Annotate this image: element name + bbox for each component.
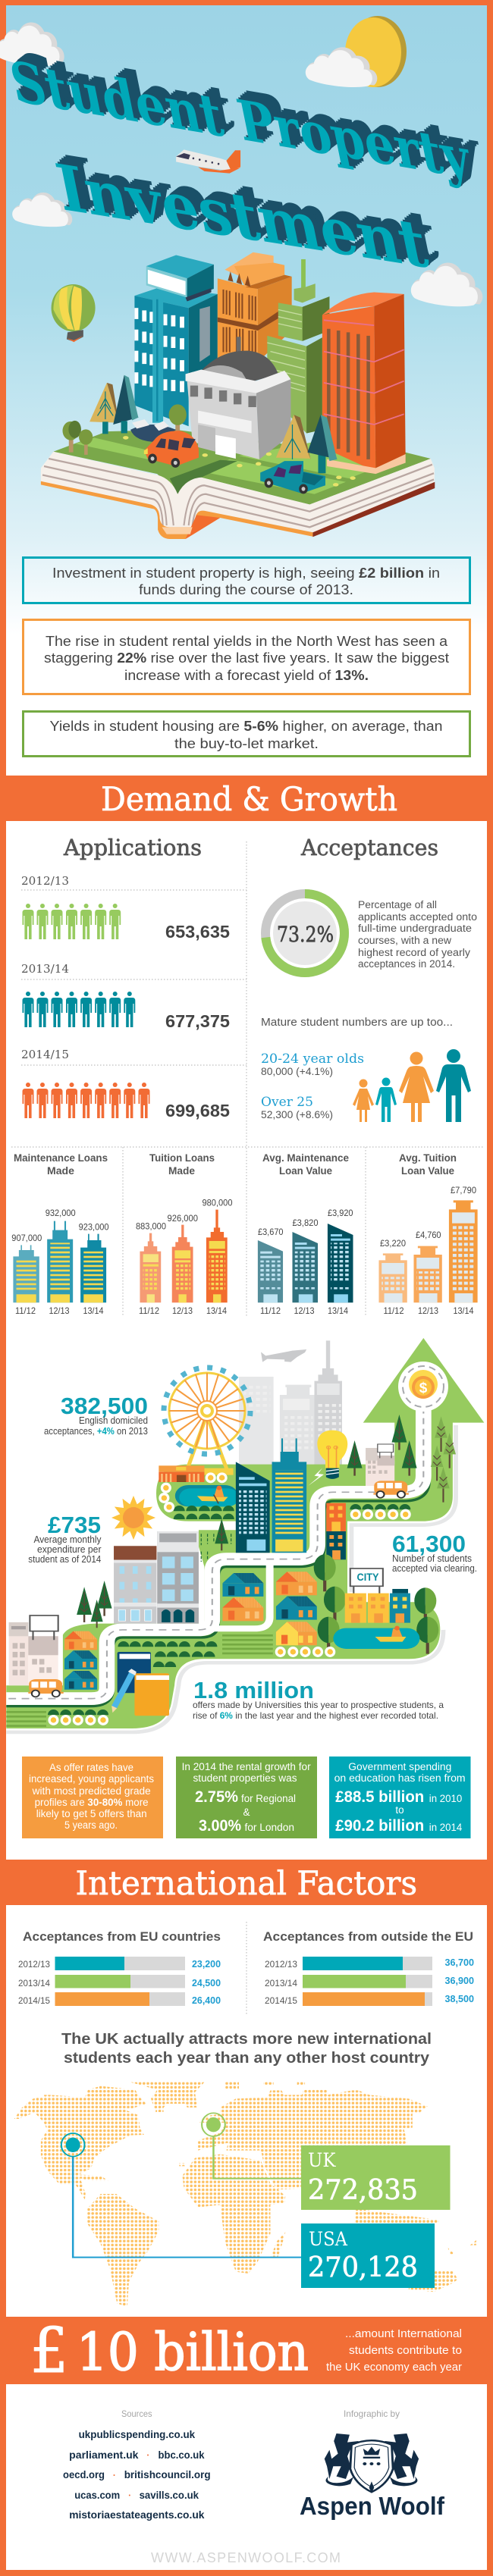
callout: 22% rise: staggering 22% rise over the last five years. It saw the biggest (44, 650, 449, 666)
logo crest (325, 2433, 419, 2493)
chart: acceptances from outside the EU: 36,700 (444, 1957, 474, 1968)
callout: USA 270,128: USA (309, 2228, 348, 2250)
dividers (11, 841, 483, 1316)
info box: government spending: £88.5 billion (335, 1788, 424, 1806)
stat: 1.8 million: 1.8 million (193, 1677, 314, 1703)
chart: tuition loans made: 926,000 (167, 1213, 198, 1224)
pin and line: UK (202, 2113, 301, 2179)
applications 2013/14 (21, 962, 230, 1031)
stat: £735 (28, 1512, 102, 1565)
title line 2 extrusion: Investment (60, 142, 444, 275)
info box: offer rates: likely to get 5 offers than (36, 1808, 147, 1819)
chart: maintenance loans made: 11/12 (15, 1305, 36, 1316)
grass strips and bushes (6, 1634, 273, 1727)
callout: USA 270,128: 270,128 (308, 2252, 418, 2283)
band: £10 billion: £ (30, 2315, 68, 2387)
stat: 382,500: English domiciled (79, 1415, 148, 1426)
donut chart 73.2%: 73.2% (277, 922, 334, 947)
title line 2 extrusion: Investment (58, 143, 441, 277)
heading: UK attracts more students: The UK actually attracts more new international (61, 2031, 432, 2048)
chart: acceptances from EU countries: Acceptances from EU countries (23, 1929, 221, 1944)
applications 2012/13: 653,635 (165, 922, 230, 942)
stat: 61,300: Number of students (392, 1553, 472, 1564)
green land with arrow (6, 1338, 484, 1732)
sources list: ucas.com (74, 2489, 120, 2501)
chart: acceptances from outside the EU: 38,500 (444, 1993, 474, 2004)
section band: Demand & Growth: Demand & Growth (101, 781, 397, 819)
callout: UK 272,835 (301, 2145, 451, 2210)
credit: infographic by Aspen Woolf: Infographic by (344, 2408, 400, 2419)
stat: 382,500 (44, 1393, 148, 1437)
applications 2014/15: 2014/15 (21, 1048, 69, 1061)
applications 2013/14: 677,375 (165, 1011, 230, 1031)
coin roundabout (398, 1362, 448, 1412)
divider (246, 1922, 247, 2015)
info box: offer rates (22, 1757, 163, 1838)
pine in front of left block (215, 1518, 228, 1550)
chart: average tuition loan value: Avg. Tuition (399, 1152, 457, 1164)
chart: average maintenance loan value: Avg. Maintenance (262, 1152, 349, 1164)
trees and left block (9, 1581, 112, 1685)
chart: maintenance loans made: Made (47, 1164, 74, 1177)
panel: acceptances (261, 835, 477, 1122)
chart: average tuition loan value: £4,760 (416, 1230, 441, 1240)
chart: acceptances from outside the EU: 2014/15 (265, 1995, 297, 2006)
road (6, 1408, 429, 1706)
acceptance description: applicants accepted onto (358, 911, 477, 923)
chart: acceptances from outside the EU: 2012/13 (265, 1959, 297, 1970)
illustration: city on open book (41, 252, 435, 539)
stat: 382,500: 382,500 (61, 1393, 148, 1419)
coin roundabout: $ (419, 1380, 428, 1396)
chart: tuition loans made: 11/12 (139, 1305, 159, 1316)
sources list: ukpublicspending.co.uk (79, 2428, 195, 2440)
book cover (41, 481, 435, 539)
chart: average maintenance loan value: Loan Value (279, 1164, 332, 1177)
chart: maintenance loans made: 12/13 (49, 1305, 70, 1316)
applications 2012/13 (21, 874, 230, 942)
small bushes (123, 436, 356, 487)
chart: tuition loans made: 12/13 (172, 1305, 193, 1316)
chart: acceptances from outside the EU: 2013/14 (265, 1978, 297, 1988)
chart: average tuition loan value (378, 1152, 478, 1316)
illustrated road map (6, 1338, 484, 1732)
sources list: mistoriaestateagents.co.uk (69, 2509, 205, 2521)
callout: £2 billion: funds during the course of 2013. (139, 582, 353, 597)
panel: applications (21, 835, 230, 1120)
dotted world map (11, 2081, 485, 2316)
callout: 22% rise: The rise in student rental yields in the North West has seen a (46, 634, 448, 649)
chart: average tuition loan value: 11/12 (384, 1305, 404, 1316)
sources list: britishcouncil.org (124, 2468, 211, 2480)
sources list (63, 2408, 211, 2521)
callout: UK 272,835: 272,835 (308, 2175, 418, 2206)
chart: average maintenance loan value: 13/14 (328, 1305, 348, 1316)
bus on road (373, 1481, 409, 1498)
chart: maintenance loans made: Maintenance Loans (14, 1152, 108, 1164)
sources list: Sources (121, 2408, 152, 2419)
stat: £735: Average monthly (33, 1534, 102, 1545)
chart: average tuition loan value: Loan Value (401, 1164, 454, 1177)
book grass (53, 430, 431, 505)
city billboard (350, 1568, 383, 1596)
chart: average maintenance loan value: £3,670 (258, 1227, 284, 1237)
heading: UK attracts more students: students each year than any other host country (64, 2050, 430, 2067)
stat: over 25: 52,300 (+8.6%) (261, 1108, 333, 1120)
dark teal building (236, 1462, 270, 1553)
city billboard label: CITY (356, 1571, 379, 1583)
grey skyline (239, 1340, 342, 1465)
info box: government spending (329, 1757, 470, 1838)
cloud left (12, 193, 72, 227)
stat: 20-24 year olds: 20-24 year olds (261, 1051, 364, 1067)
chart: tuition loans made: Made (168, 1164, 195, 1177)
chart: average maintenance loan value: 12/13 (294, 1305, 315, 1316)
sun (345, 16, 407, 87)
chart: acceptances from EU countries: 24,500 (192, 1977, 221, 1988)
info box: rental growth: 2.75% (195, 1788, 238, 1806)
lake with rower (175, 1485, 239, 1506)
section band: International Factors (0, 1860, 493, 1905)
website footer: WWW.ASPENWOOLF.COM (151, 2550, 341, 2565)
mature students text: Mature student numbers are up too... (261, 1016, 453, 1029)
info box: rental growth: for Regional (241, 1793, 296, 1804)
band: £10 billion: 10 billion (77, 2323, 309, 2383)
bushes and flowers (159, 1472, 411, 1520)
chart: acceptances from outside the EU: Acceptances from outside the EU (263, 1929, 473, 1944)
yellow blocks (345, 1589, 410, 1623)
park pavilion (159, 1465, 234, 1482)
icon: sun (111, 1496, 155, 1540)
callout: 5-6% higher: the buy-to-let market. (174, 736, 319, 751)
cloud top right (306, 47, 377, 87)
right trees (276, 415, 337, 473)
callout: 5-6% higher (23, 711, 470, 757)
ferris wheel (164, 1368, 250, 1469)
houses (64, 1572, 317, 1690)
donut chart 73.2% (265, 894, 344, 973)
stat: £735: £735 (48, 1512, 101, 1538)
info box: rental growth: & (243, 1807, 250, 1818)
info box: government spending: £90.2 billion (335, 1817, 424, 1835)
callout: UK 272,835: UK (308, 2149, 337, 2171)
pine trees by arrow (347, 1415, 456, 1503)
left trees (62, 375, 187, 455)
grey apartment blocks (114, 1531, 199, 1624)
stat: 61,300 (392, 1531, 477, 1574)
stat: 61,300: accepted via clearing. (392, 1563, 477, 1574)
sources list: parliament.uk (69, 2449, 139, 2461)
info box: offer rates: increased, young applicants (29, 1773, 154, 1785)
sources list: bbc.co.uk (158, 2449, 205, 2461)
chart: average tuition loan value: 12/13 (418, 1305, 438, 1316)
callout: 22% rise (23, 620, 470, 694)
chart: tuition loans made: Tuition Loans (149, 1152, 215, 1164)
chart: average maintenance loan value: £3,920 (328, 1208, 353, 1218)
chart: average maintenance loan value: £3,820 (293, 1217, 319, 1228)
teal pickup truck (260, 461, 325, 494)
section band: Demand & Growth (0, 776, 493, 821)
chart: average maintenance loan value: 11/12 (260, 1305, 281, 1316)
applications 2014/15: 699,685 (165, 1101, 230, 1120)
applications 2014/15 (21, 1048, 230, 1120)
info box: offer rates: profiles are 30-80% more (35, 1797, 149, 1808)
teal striped building (272, 1438, 306, 1553)
stat: £735: student as of 2014 (28, 1554, 101, 1565)
lower bus (28, 1679, 64, 1697)
stat: 1.8 million: offers made by Universities this year to prospective students, a (193, 1700, 444, 1710)
heading: Applications: Applications (63, 835, 202, 860)
chart: maintenance loans made: 932,000 (46, 1208, 76, 1218)
info box: rental growth: 3.00% (199, 1817, 241, 1835)
green tower (267, 259, 329, 433)
callout: £2 billion (23, 558, 470, 603)
acceptance description: full-time undergraduate (358, 923, 472, 934)
balloon (52, 284, 96, 342)
info box: offer rates: with most predicted grade (32, 1785, 151, 1797)
chart: tuition loans made: 980,000 (202, 1198, 233, 1208)
teal tower (134, 255, 218, 426)
stat: over 25 (261, 1095, 333, 1120)
light bulb (308, 1431, 347, 1486)
cloud right (411, 262, 482, 306)
info box: government spending: Government spending (348, 1761, 451, 1772)
mid city blocks (326, 1503, 346, 1559)
grass beside blocks (201, 1534, 231, 1562)
chart: acceptances from outside the EU: 36,900 (444, 1975, 474, 1986)
band: £10 billion: students contribute to (349, 2344, 462, 2357)
chart: acceptances from EU countries: 23,200 (192, 1958, 221, 1970)
info box: government spending: in 2010 (429, 1793, 462, 1804)
credit: infographic by Aspen Woolf (300, 2408, 445, 2520)
orange car (144, 431, 199, 468)
chart: maintenance loans made (11, 1152, 109, 1316)
acceptance description: acceptances in 2014. (358, 958, 455, 970)
acceptance description: Percentage of all (358, 899, 437, 910)
round trees (314, 1554, 438, 1654)
title line 2 extrusion: Investment (54, 146, 438, 280)
chart: average tuition loan value: £3,220 (380, 1238, 406, 1249)
chart: average maintenance loan value (258, 1152, 353, 1316)
chart: acceptances from EU countries: 26,400 (192, 1995, 221, 2006)
band: £10 billion: the UK economy each year (326, 2361, 462, 2374)
logo wordmark: Aspen Woolf (300, 2492, 445, 2520)
info box: rental growth: for London (244, 1822, 294, 1833)
plane (176, 149, 240, 174)
title line 2 face: Investment (50, 150, 434, 284)
stat: 20-24 year olds: 80,000 (+4.1%) (261, 1065, 333, 1077)
chart: average tuition loan value: 13/14 (454, 1305, 474, 1316)
chart: average tuition loan value: £7,790 (451, 1185, 476, 1196)
applications 2012/13: 2012/13 (21, 874, 69, 888)
park and upper city (6, 1415, 456, 1727)
stat: 1.8 million: rise of 6% in the last year and the highest ever recorded total. (193, 1710, 438, 1721)
pin and line: USA (61, 2133, 301, 2258)
book pages (41, 452, 435, 532)
chart: acceptances from EU countries: 2014/15 (18, 1995, 50, 2006)
info box: offer rates: 5 years ago. (64, 1819, 118, 1831)
hero sky (6, 5, 487, 635)
band: £10 billion: ...amount International (345, 2327, 462, 2340)
stat: £735: expenditure per (37, 1544, 102, 1555)
band: £10 billion (0, 2315, 493, 2387)
section band: International Factors: International Factors (76, 1865, 417, 1903)
stat: over 25: Over 25 (261, 1095, 313, 1110)
acceptance description: courses, with a new (358, 935, 451, 946)
chart: maintenance loans made: 923,000 (79, 1222, 109, 1233)
applications 2013/14: 2013/14 (21, 962, 69, 976)
domed white building (186, 337, 290, 459)
chart: maintenance loans made: 907,000 (11, 1233, 42, 1243)
info box: rental growth (176, 1757, 317, 1838)
stat: 61,300: 61,300 (392, 1531, 466, 1557)
heading: UK attracts more students (61, 2031, 432, 2067)
sources list: savills.co.uk (140, 2489, 199, 2501)
stat: 1.8 million (193, 1677, 444, 1721)
panel: loan charts (11, 1152, 478, 1316)
stat: 20-24 year olds (261, 1051, 364, 1077)
chart: tuition loans made: 13/14 (206, 1305, 227, 1316)
cloud top left (0, 22, 64, 66)
pale building with billboard (366, 1444, 394, 1486)
chart: maintenance loans made: 13/14 (83, 1305, 104, 1316)
chart: acceptances from EU countries (18, 1929, 221, 2006)
chart: acceptances from EU countries: 2013/14 (18, 1978, 50, 1988)
info box: rental growth: In 2014 the rental growth for (182, 1761, 311, 1772)
info box: government spending: to (395, 1804, 404, 1816)
chart: tuition loans made: 883,000 (136, 1221, 166, 1232)
info box: government spending: in 2014 (429, 1822, 463, 1833)
icon: books and pencil (111, 1652, 169, 1716)
title line 2 extrusion: Investment (52, 149, 436, 282)
lower lake with rower (275, 1626, 419, 1657)
icon: family (353, 1049, 471, 1122)
stat: 382,500: acceptances, +4% on 2013 (44, 1426, 148, 1437)
callout: 22% rise: increase with a forecast yield of 13%. (124, 668, 369, 683)
chart: acceptances from EU countries: 2012/13 (18, 1959, 50, 1970)
info box: rental growth: student properties was (193, 1772, 297, 1784)
title: Student Property Investment (5, 39, 487, 284)
chart: acceptances from outside the EU (263, 1929, 474, 2006)
info box: offer rates: As offer rates have (49, 1762, 133, 1773)
callout: 5-6% higher: Yields in student housing are 5-6% higher, on average, than (50, 719, 443, 734)
callout: £2 billion: Investment in student property is high, seeing £2 billion in (52, 566, 440, 581)
title line 2 extrusion: Investment (56, 145, 440, 278)
acceptance description: highest record of yearly (358, 947, 470, 958)
sources list: oecd.org (63, 2468, 105, 2480)
chart: tuition loans made (136, 1152, 233, 1316)
callout: USA 270,128 (301, 2223, 435, 2288)
acceptance description (358, 899, 477, 970)
info box: government spending: on education has risen from (334, 1772, 466, 1784)
orange tower (218, 252, 292, 362)
orange-red tower (322, 293, 406, 474)
heading: Acceptances: Acceptances (300, 835, 438, 860)
